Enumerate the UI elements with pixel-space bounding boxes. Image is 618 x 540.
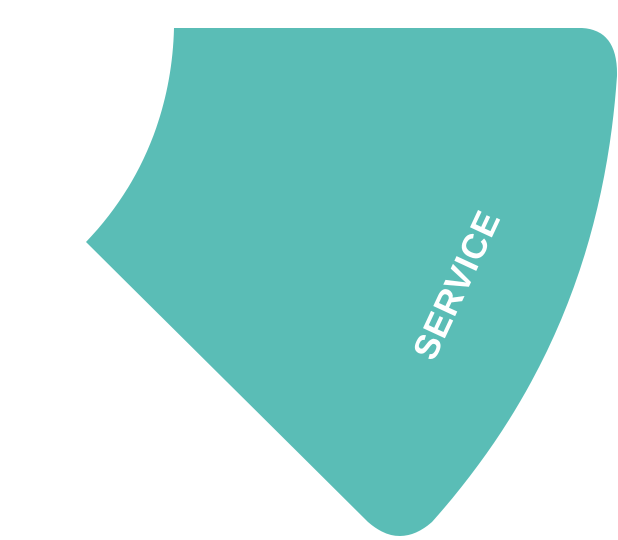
label: SERVICE: SERVICE	[405, 204, 508, 366]
